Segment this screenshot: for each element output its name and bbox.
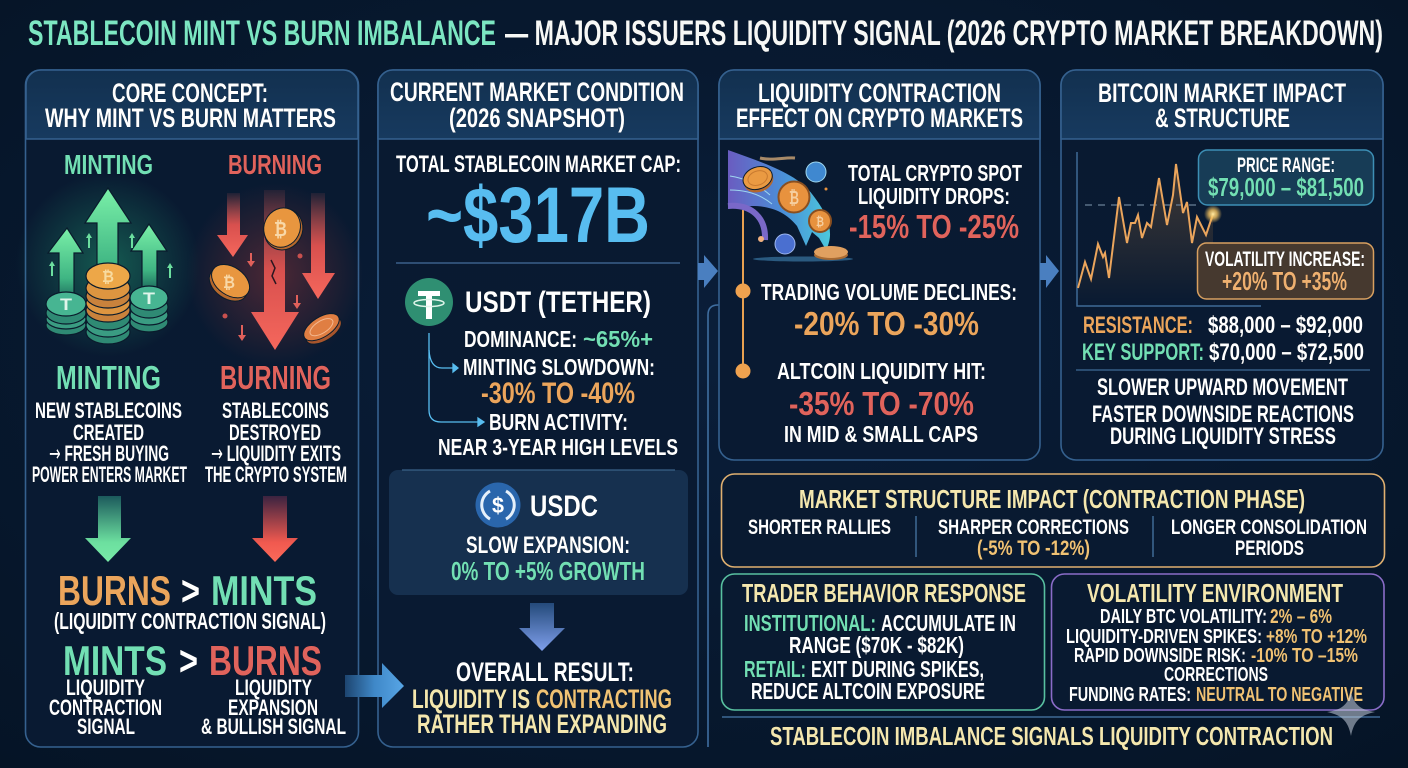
heading: current market condition: CURRENT MARKET CONDITION — [390, 77, 684, 107]
text: resistance: RESISTANCE: — [1083, 312, 1193, 339]
text: minting slowdown: -30% TO -40% — [481, 377, 635, 410]
panel: core concept — [16, 70, 363, 747]
text: sharper corrections: (-5% TO -12%) — [977, 537, 1090, 560]
text: funding rates: FUNDING RATES: — [1069, 683, 1191, 706]
signal: mints over burns: MINTS — [63, 637, 167, 684]
text: market cap label: TOTAL STABLECOIN MARKET CAP: — [396, 151, 681, 178]
text: downside risk — [1074, 644, 1358, 686]
text: spot liquidity: LIQUIDITY DROPS: — [858, 183, 1010, 209]
arrow: red down — [252, 496, 298, 562]
text: dominance: ~65%+ — [583, 326, 653, 352]
arrow: liquidity to bitcoin — [1040, 255, 1059, 288]
icon: minting arrows and coin stacks: ₿ — [102, 267, 114, 286]
heading: liquidity contraction: LIQUIDITY CONTRACTION — [758, 78, 1001, 108]
text: liquidity spikes: LIQUIDITY-DRIVEN SPIKES: — [1066, 625, 1262, 648]
text: overall result: OVERALL RESULT: — [456, 657, 634, 687]
text: daily volatility: 2% – 6% — [1270, 605, 1332, 628]
heading: core concept: WHY MINT VS BURN MATTERS — [45, 103, 336, 133]
text: shorter rallies: SHORTER RALLIES — [748, 516, 891, 539]
signal: burns over mints — [58, 567, 317, 614]
text: burning description: DESTROYED — [229, 420, 321, 445]
text: sharper corrections: SHARPER CORRECTIONS — [938, 516, 1129, 539]
metric: market cap: ~$317B — [426, 170, 650, 259]
text: key support: $70,000 – $72,500 — [1209, 339, 1364, 366]
text: left signal caption: CONTRACTION — [49, 695, 162, 720]
signal: burns over mints: > — [181, 567, 200, 614]
text: burning description: → LIQUIDITY EXITS — [211, 441, 341, 467]
icon: usdc: $ — [492, 493, 504, 518]
text: longer consolidation: PERIODS — [1235, 537, 1304, 560]
text: spot liquidity — [848, 160, 1022, 209]
text: right signal caption: LIQUIDITY — [235, 675, 312, 700]
arrow: market condition to liquidity — [698, 255, 718, 288]
heading: current market condition: (2026 SNAPSHOT) — [449, 103, 625, 133]
title — [28, 14, 1383, 53]
heading: core concept: CORE CONCEPT: — [112, 78, 268, 108]
callout: price range — [1198, 150, 1374, 205]
icon: minting arrows and coin stacks: T — [60, 295, 73, 314]
text: daily volatility: DAILY BTC VOLATILITY: — [1100, 605, 1267, 628]
text: institutional: RANGE ($70K - $82K) — [789, 632, 964, 658]
text: minting slowdown — [463, 354, 655, 410]
heading: bitcoin: & STRUCTURE — [1155, 103, 1290, 133]
text: trading volume: TRADING VOLUME DECLINES: — [761, 279, 1017, 305]
text: right signal caption — [201, 675, 346, 739]
text: burning description: THE CRYPTO SYSTEM — [205, 462, 347, 487]
icon: usdc — [476, 482, 520, 528]
callout: volatility increase — [1198, 243, 1374, 299]
text: left signal caption: LIQUIDITY — [66, 675, 145, 700]
heading: liquidity contraction — [736, 78, 1023, 133]
label: burning top: BURNING — [228, 149, 322, 180]
text: bitcoin summary — [1092, 374, 1354, 450]
signal: burns over mints: MINTS — [211, 567, 317, 614]
icon: liquidity wave with coins: ₿ — [816, 215, 824, 230]
text: caps: IN MID & SMALL CAPS — [784, 421, 978, 447]
text: left signal caption: SIGNAL — [77, 714, 135, 739]
arrow: green down — [85, 496, 131, 562]
icon: tether — [405, 278, 453, 326]
icon: burning arrows and falling coins: ₿ — [274, 217, 287, 241]
panel: market structure impact — [722, 474, 1384, 567]
label: minting: MINTING — [56, 360, 161, 397]
arrow: down to overall result — [519, 603, 565, 651]
text: minting description: POWER ENTERS MARKET — [32, 462, 187, 487]
card: usdc — [389, 470, 688, 595]
text: usdc growth: 0% TO +5% GROWTH — [451, 558, 645, 586]
signal: burns over mints: BURNS — [58, 567, 171, 614]
heading: liquidity contraction: EFFECT ON CRYPTO MARKETS — [736, 103, 1023, 133]
connector lines: usdt — [429, 333, 484, 426]
icon: burning arrows and falling coins — [187, 183, 363, 367]
heading: usdt: USDT (TETHER) — [465, 286, 651, 319]
panel: bitcoin market impact — [1061, 70, 1383, 460]
panel: volatility environment — [1052, 574, 1384, 710]
text: downside risk: -10% TO –15% — [1251, 644, 1358, 667]
text: resistance — [1083, 312, 1363, 339]
text: left signal caption — [49, 675, 162, 739]
text: burn activity — [438, 409, 678, 460]
signal: mints over burns: BURNS — [209, 637, 322, 684]
text: key support — [1082, 339, 1364, 366]
panel: liquidity contraction effect — [719, 70, 1040, 460]
text: right signal caption: EXPANSION — [228, 695, 318, 720]
text: liquidity conclusion: CONTRACTING — [536, 684, 672, 714]
text: retail: REDUCE ALTCOIN EXPOSURE — [751, 678, 985, 704]
icon: minting arrows and coin stacks — [16, 173, 200, 357]
text: downside risk: RAPID DOWNSIDE RISK: — [1074, 644, 1246, 667]
heading: bitcoin — [1098, 78, 1346, 133]
heading: core concept — [45, 78, 336, 133]
text: liquidity spikes: +8% TO +12% — [1266, 625, 1367, 648]
panel: current market condition — [378, 70, 698, 747]
signal: mints over burns — [63, 637, 322, 684]
icon: burning arrows and falling coins: ₿ — [223, 273, 235, 293]
timeline — [736, 210, 750, 378]
callout: volatility increase: +20% TO +35% — [1222, 268, 1347, 296]
heading: usdc: USDC — [530, 490, 598, 523]
signal: mints over burns: > — [179, 637, 198, 684]
text: altcoin liquidity: ALTCOIN LIQUIDITY HIT: — [777, 358, 986, 384]
text: spot liquidity: TOTAL CRYPTO SPOT — [848, 160, 1022, 186]
title: STABLECOIN MINT VS BURN IMBALANCE — [28, 14, 496, 53]
text: downside risk: CORRECTIONS — [1164, 663, 1268, 686]
metric: trading volume: -20% TO -30% — [794, 305, 979, 342]
text: sharper corrections — [938, 516, 1129, 560]
chart: bitcoin price — [1077, 152, 1261, 306]
text: dominance: DOMINANCE: — [464, 326, 577, 352]
icon: liquidity wave with coins: ₿ — [789, 188, 799, 209]
icon: liquidity wave with coins — [728, 150, 853, 262]
text: institutional: INSTITUTIONAL: — [744, 610, 876, 636]
text: resistance: $88,000 – $92,000 — [1208, 312, 1363, 339]
metric: spot liquidity: -15% TO -25% — [849, 208, 1019, 245]
text: longer consolidation — [1171, 516, 1367, 560]
text: liquidity conclusion: RATHER THAN EXPANDING — [417, 709, 667, 739]
text: retail: EXIT DURING SPIKES, — [811, 656, 984, 682]
text: retail — [744, 656, 985, 704]
panel: trader behavior — [722, 574, 1044, 710]
text: minting description: → FRESH BUYING — [49, 441, 169, 467]
text: burn activity: BURN ACTIVITY: — [489, 409, 628, 435]
text: burning description — [205, 398, 347, 487]
text: slow expansion: SLOW EXPANSION: — [466, 532, 630, 559]
label: minting top: MINTING — [64, 149, 153, 180]
icon: sparkle — [1327, 692, 1375, 736]
text: retail: RETAIL: — [744, 656, 806, 682]
text: liquidity conclusion: LIQUIDITY IS — [412, 684, 530, 714]
text: minting slowdown: MINTING SLOWDOWN: — [463, 354, 655, 380]
text: institutional — [744, 610, 1016, 658]
text: minting description: NEW STABLECOINS — [35, 398, 182, 423]
text: minting description: CREATED — [73, 420, 144, 445]
callout: price range: PRICE RANGE: — [1237, 154, 1335, 177]
text: burn activity: NEAR 3-YEAR HIGH LEVELS — [438, 434, 678, 460]
text: burning description: STABLECOINS — [222, 398, 329, 423]
metric: altcoin liquidity: -35% TO -70% — [789, 385, 974, 422]
connector line: to lower panels — [708, 305, 720, 747]
heading: current market condition — [390, 77, 684, 133]
label: burning: BURNING — [220, 360, 331, 397]
heading: trader behavior: TRADER BEHAVIOR RESPONSE — [742, 580, 1026, 608]
arrow: core concept to result — [345, 663, 404, 708]
text: liquidity conclusion — [412, 684, 672, 739]
text: institutional: ACCUMULATE IN — [881, 610, 1016, 636]
text: right signal caption: & BULLISH SIGNAL — [201, 714, 346, 739]
text: contraction signal: (LIQUIDITY CONTRACTION SIGNAL) — [54, 608, 326, 634]
icon: minting arrows and coin stacks: T — [143, 289, 156, 308]
text: funding rates — [1069, 683, 1363, 706]
text: key support: KEY SUPPORT: — [1082, 339, 1204, 366]
text: minting description — [32, 398, 187, 487]
